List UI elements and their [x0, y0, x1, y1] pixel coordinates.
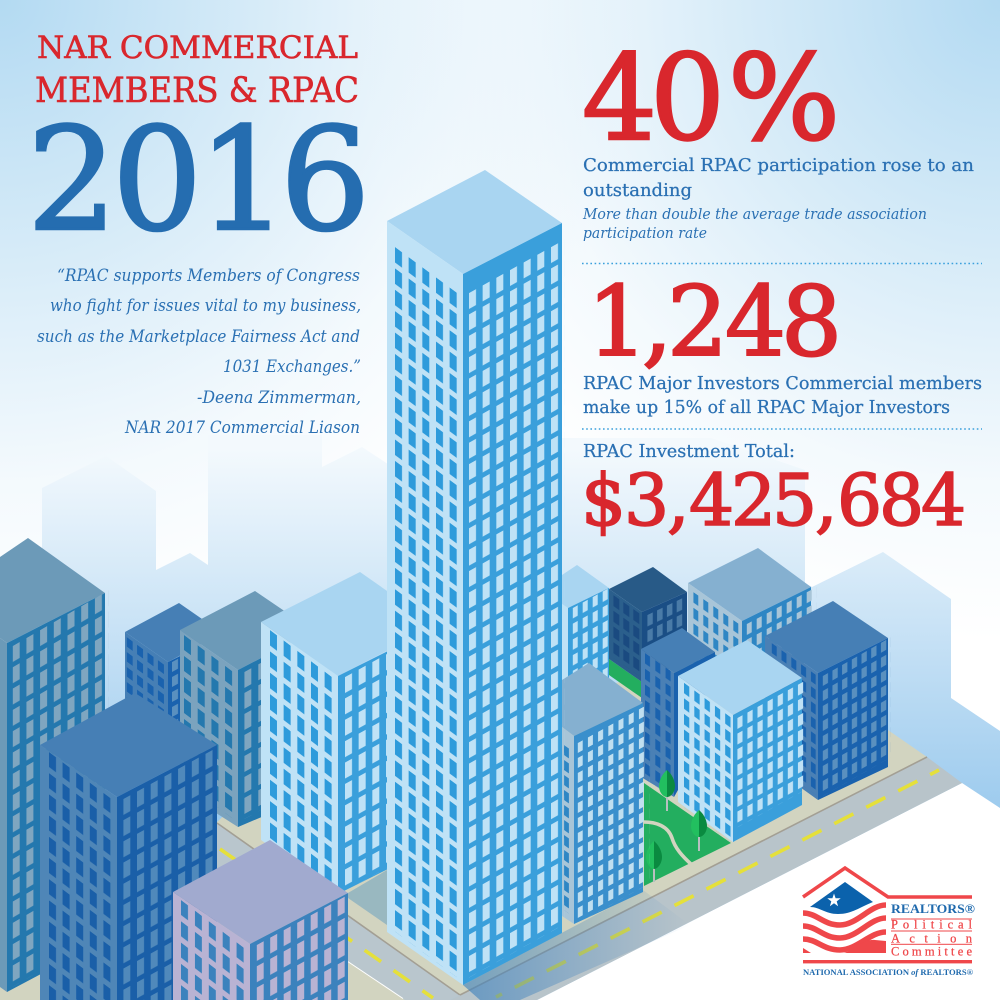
- lawn behind dark building: [609, 659, 642, 698]
- building: dark blue right: [765, 601, 891, 800]
- building: big blue front-left: [40, 693, 217, 1000]
- building: central tall tower: [387, 170, 565, 985]
- building: dark navy: [609, 567, 687, 682]
- stat: 40%: [582, 29, 974, 242]
- title: MEMBERS & RPAC: [35, 71, 359, 111]
- title: [35, 30, 359, 111]
- stat: 40%: More than double the average trade association: [582, 207, 927, 223]
- title: NAR COMMERCIAL: [37, 30, 358, 66]
- stat: investment total: RPAC Investment Total:: [583, 441, 795, 462]
- building: light blue left of tower: [261, 572, 400, 896]
- quote: -Deena Zimmerman,: [197, 388, 361, 407]
- quote: such as the Marketplace Fairness Act and: [37, 327, 360, 346]
- quote: NAR 2017 Commercial Liason: [124, 418, 360, 437]
- logo: REALTORS Political Action Committee: Political: [891, 918, 973, 932]
- stat: 40%: 40%: [582, 29, 840, 167]
- left road: [217, 823, 460, 1000]
- year heading: 2016: [27, 98, 370, 263]
- right road: [450, 757, 962, 1000]
- building: grey mid-left: [180, 591, 305, 827]
- quote: 1031 Exchanges.”: [223, 357, 361, 376]
- stat: 1,248: [583, 266, 982, 418]
- building: purple front: [173, 840, 348, 1000]
- stat: investment total: $3,425,684: [581, 459, 966, 542]
- stat: 1,248: 1,248: [587, 266, 842, 378]
- quote: who fight for issues vital to my business,: [50, 296, 361, 315]
- stat: 1,248: RPAC Major Investors Commercial members: [583, 373, 982, 394]
- stat: 40%: Commercial RPAC participation rose to an: [583, 155, 974, 176]
- tree 3: [646, 841, 662, 882]
- trees: [646, 770, 707, 882]
- building: grey-blue mid right: [562, 663, 649, 924]
- building: small blue middle: [641, 628, 715, 800]
- logo: REALTORS Political Action Committee: [803, 868, 975, 977]
- park lawn with path: [644, 783, 731, 886]
- tree 1: [659, 770, 675, 811]
- building: light blue behind right cluster: [562, 565, 613, 702]
- building: far-left tall grey-blue: [0, 538, 109, 992]
- logo: REALTORS Political Action Committee: Action: [891, 932, 973, 946]
- logo: REALTORS Political Action Committee: NATIONAL ASSOCIATION of REALTORS®: [803, 968, 973, 977]
- quote: [37, 266, 361, 437]
- quote: “RPAC supports Members of Congress: [57, 266, 360, 285]
- stat: 40%: outstanding: [583, 180, 692, 201]
- logo: REALTORS Political Action Committee: Committee: [891, 944, 972, 958]
- tree 2: [691, 810, 707, 851]
- logo: REALTORS Political Action Committee: REALTORS®: [891, 901, 975, 916]
- building: light grey-blue upper right: [688, 548, 817, 706]
- stat: 40%: participation rate: [583, 226, 707, 242]
- tower shadows on ground: [348, 870, 690, 1000]
- stat: 1,248: make up 15% of all RPAC Major Investors: [583, 397, 950, 418]
- building: light blue front right: [678, 640, 808, 846]
- background skyline silhouette: [42, 435, 1000, 1000]
- ground: sidewalks: [0, 660, 927, 1000]
- building: small blue behind: [125, 603, 215, 750]
